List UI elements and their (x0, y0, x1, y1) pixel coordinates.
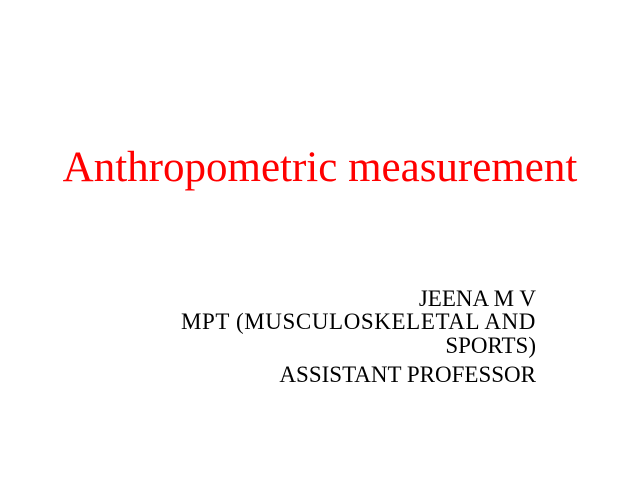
author block: MPT (MUSCULOSKELETAL AND (181, 309, 536, 334)
author block: JEENA M V (419, 286, 536, 311)
author block (181, 286, 536, 387)
title: Anthropometric measurement (63, 144, 577, 191)
author block: SPORTS) (445, 333, 536, 358)
author block: ASSISTANT PROFESSOR (279, 362, 536, 387)
